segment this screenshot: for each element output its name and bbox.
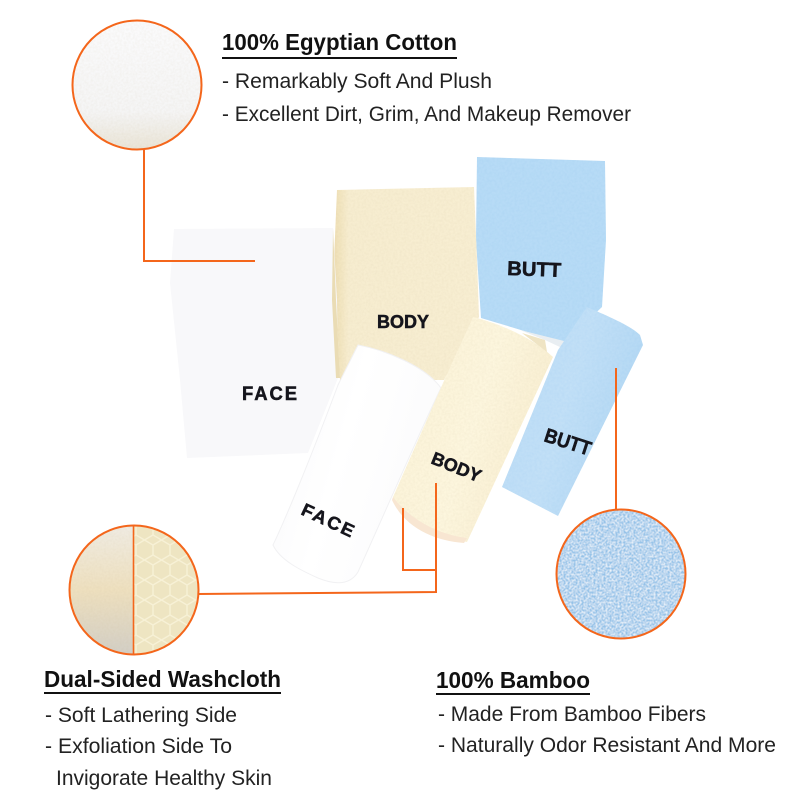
text block: dual-sided washcloth bbox=[44, 666, 281, 790]
connector: bamboo circle to butt towel bbox=[615, 368, 617, 511]
connector: dual-sided circle to body towel bbox=[198, 483, 436, 594]
white flat towel bbox=[170, 228, 340, 458]
white rolled towel: FACE bbox=[298, 499, 359, 542]
cream rolled towel: BODY bbox=[429, 448, 484, 486]
heading: bamboo: 100% Bamboo bbox=[436, 667, 590, 693]
cream flat towel bbox=[334, 187, 479, 380]
heading: egyptian cotton: 100% Egyptian Cotton bbox=[222, 29, 457, 55]
cream rolled towel bbox=[392, 317, 553, 543]
text block: bamboo: - Made From Bamboo Fibers bbox=[438, 703, 706, 726]
icon: dual-sided texture circle bbox=[68, 524, 200, 656]
blue rolled towel bbox=[502, 307, 643, 516]
icon: bamboo texture circle bbox=[555, 508, 687, 640]
text block: dual-sided washcloth: Invigorate Healthy Skin bbox=[56, 767, 272, 790]
blue flat towel bbox=[476, 157, 606, 348]
text block: egyptian cotton: - Excellent Dirt, Grim, And Makeup Remover bbox=[222, 103, 631, 126]
cream flat towel: BODY bbox=[377, 312, 429, 332]
text block: dual-sided washcloth: - Exfoliation Side To bbox=[45, 735, 232, 758]
text block: dual-sided washcloth: - Soft Lathering Side bbox=[45, 704, 237, 727]
connector: cotton circle to face towel bbox=[144, 150, 255, 261]
text block: egyptian cotton bbox=[222, 29, 631, 126]
text block: egyptian cotton: - Remarkably Soft And Plush bbox=[222, 70, 492, 93]
heading: dual-sided washcloth: Dual-Sided Washcloth bbox=[44, 666, 281, 692]
blue rolled towel: BUTT bbox=[541, 425, 594, 461]
white flat towel: FACE bbox=[242, 384, 299, 405]
text block: bamboo bbox=[436, 667, 776, 757]
white rolled towel bbox=[273, 345, 441, 583]
icon: cotton texture circle bbox=[70, 18, 204, 152]
text block: bamboo: - Naturally Odor Resistant And More bbox=[438, 734, 776, 757]
towels photo bbox=[170, 157, 643, 583]
blue flat towel: BUTT bbox=[507, 258, 562, 282]
